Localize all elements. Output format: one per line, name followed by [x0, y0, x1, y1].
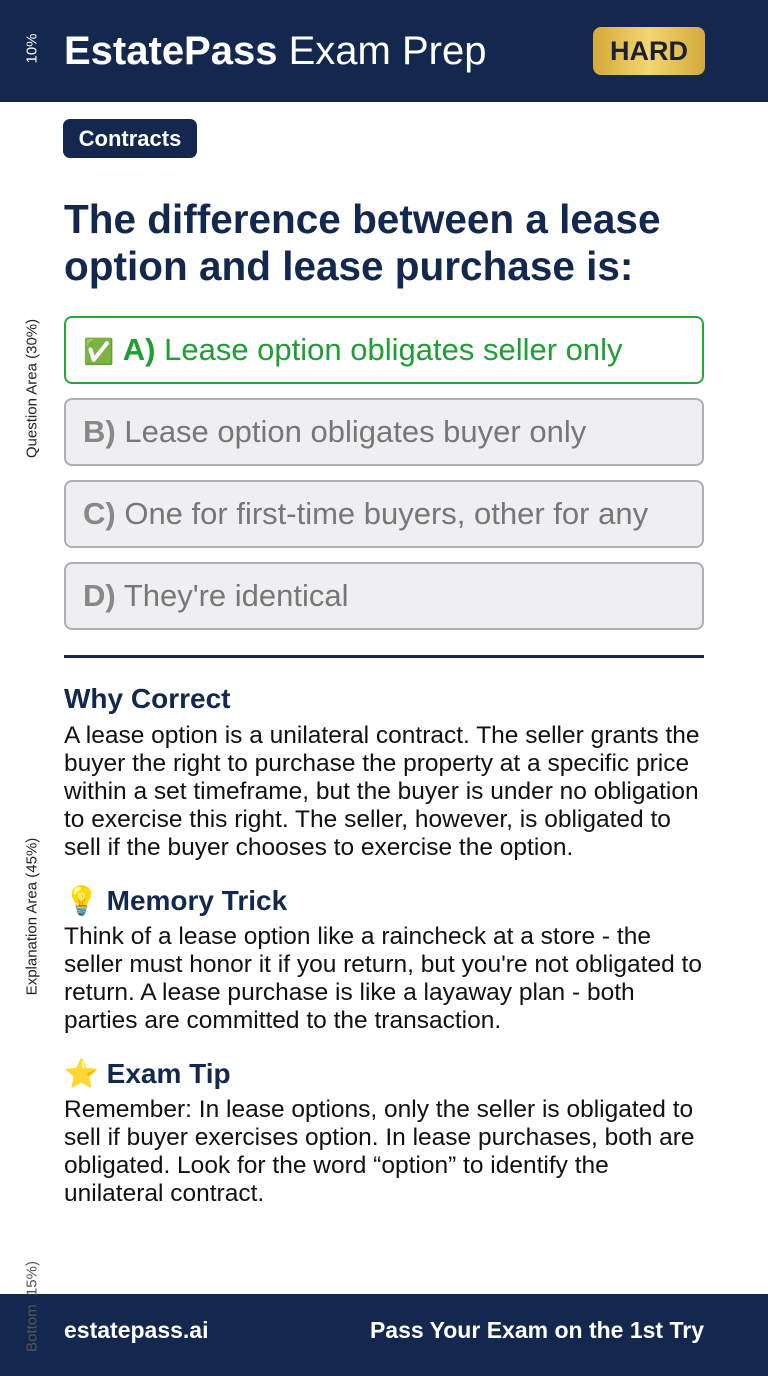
footer	[0, 1294, 768, 1376]
header	[0, 0, 768, 102]
text: why correct: A lease option is a unilateral contract. The seller grants the buyer the right to purchase the property at a specific price within a set timeframe, but the buyer is under no obligation to exercise this right. The seller, however, is obligated to sell if the buyer chooses to exercise the option.	[64, 722, 700, 861]
label: explanation area: Explanation Area (45%)	[24, 838, 40, 995]
heading: exam tip: ⭐ Exam Tip	[64, 1058, 231, 1089]
option B	[64, 398, 704, 466]
option A correct	[64, 316, 704, 384]
footer: slogan: Pass Your Exam on the 1st Try	[370, 1317, 704, 1343]
footer: site: estatepass.ai	[64, 1317, 208, 1343]
heading: memory trick: 💡 Memory Trick	[64, 885, 287, 916]
option C	[64, 480, 704, 548]
option D: D) They're identical	[83, 578, 349, 613]
badge: difficulty	[593, 27, 705, 75]
option C: C) One for first-time buyers, other for any	[83, 496, 648, 531]
option A correct: ✅ A) Lease option obligates seller only	[83, 332, 623, 367]
option B: B) Lease option obligates buyer only	[83, 414, 586, 449]
heading: why correct: Why Correct	[64, 683, 230, 714]
label: 10%: 10%	[24, 33, 40, 64]
label: question area: Question Area (30%)	[24, 319, 40, 458]
text: memory trick: Think of a lease option like a raincheck at a store - the seller must honor it if you return, but you're not obligated to return. A lease purchase is like a layaway plan - both parties are committed to the transaction.	[64, 923, 702, 1034]
tag: category: Contracts	[79, 126, 181, 151]
title: brand: EstatePass Exam Prep	[64, 29, 486, 73]
question heading: The difference between a lease option and lease purchase is:	[64, 196, 660, 289]
label: bottom: Bottom 15%)	[24, 1261, 40, 1352]
option D	[64, 562, 704, 630]
tag: category	[63, 119, 197, 158]
badge: difficulty: HARD	[610, 36, 688, 66]
text: exam tip: Remember: In lease options, only the seller is obligated to sell if buyer exercises option. In lease purchases, both are obligated. Look for the word “option” to identify the unilateral contract.	[64, 1096, 695, 1207]
